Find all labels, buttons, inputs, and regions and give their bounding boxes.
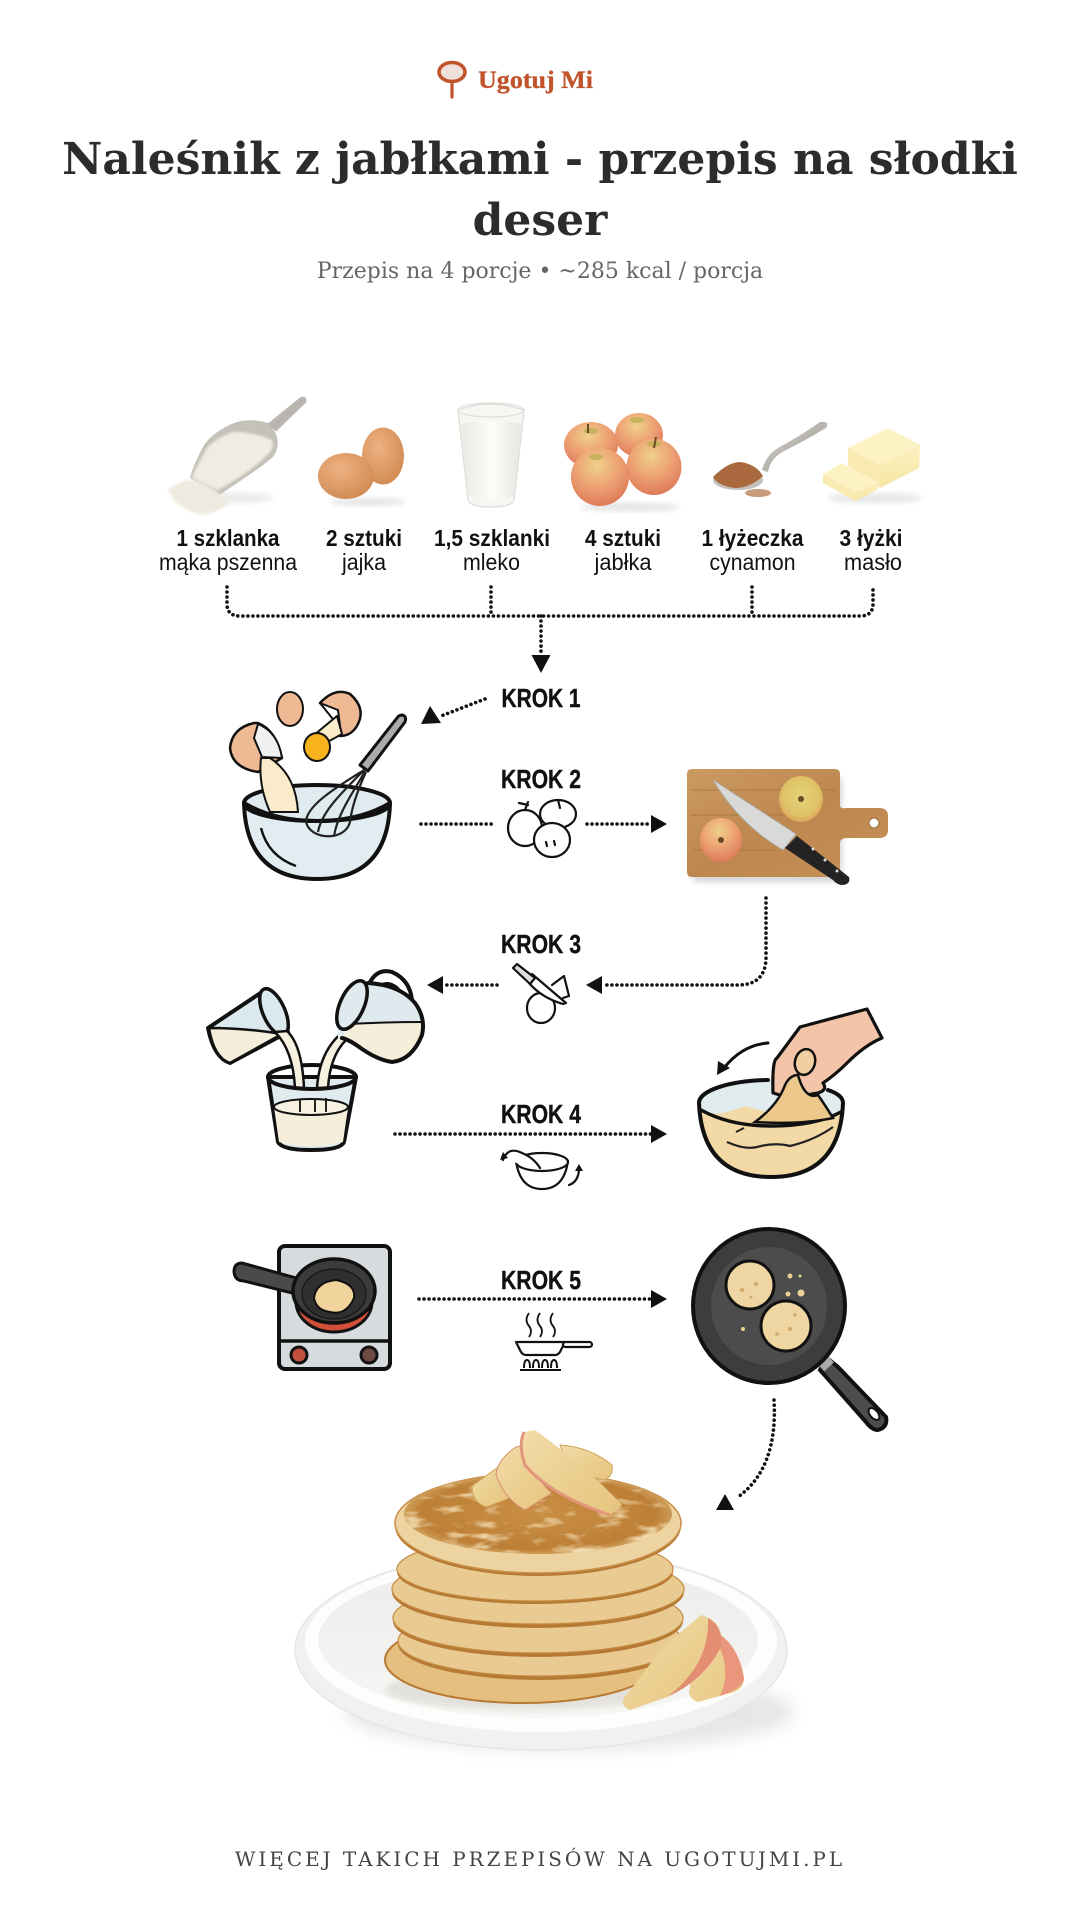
label: eggs: jajka [341,549,386,575]
ingredient: cinnamon spoon [713,422,827,497]
illustration: mixing batter with hand [699,1009,882,1177]
ingredient: apples [564,413,682,511]
illustration: frying pan with pancakes [693,1229,886,1430]
arrow: to step 1 [421,699,485,724]
apple slices on plate [623,1615,744,1710]
label: cinnamon: 1 łyżeczka [702,525,804,551]
label: cinnamon [702,525,804,575]
pancake layers [385,1470,684,1703]
label: milk [434,525,550,575]
icon: apples outline [508,800,576,857]
title: Naleśnik z jabłkami - przepis na słodki [62,134,1018,185]
arrow: board to step 3 [586,898,766,994]
label: flour: 1 szklanka [176,525,280,551]
footer: WIĘCEJ TAKICH PRZEPISÓW NA UGOTUJMI.PL [235,1847,845,1871]
label: flour: mąka pszenna [159,549,297,575]
illustration: pancake stack on plate [295,1430,795,1750]
label: butter: masło [844,549,902,575]
title [62,134,1018,246]
icon: pan on burner [516,1313,592,1370]
arrow: step 2 right [587,815,667,833]
label: eggs: 2 sztuki [326,525,402,551]
label: milk: mleko [463,549,520,575]
illustration: cutting board with apples and knife [687,769,888,885]
ingredient: flour scoop [168,397,306,514]
step label: KROK 2: KROK 2 [501,764,581,794]
illustration: pouring milk into glass [208,971,424,1150]
ingredients row [168,397,923,514]
arrow: step 4 [395,1125,667,1143]
label: apples: 4 sztuki [585,525,661,551]
label: apples: jabłka [594,549,652,575]
label: milk: 1,5 szklanki [434,525,550,551]
icon: mixing bowl with arrows [500,1151,583,1189]
arrow: step 2 left dots [421,822,495,826]
label: apples [585,525,661,575]
apple slices on top [472,1430,622,1515]
logo [439,62,593,97]
arrow: step 5 [419,1290,667,1308]
illustration: pan on stove [234,1246,390,1369]
ingredient: milk glass [458,403,524,507]
step label: KROK 5: KROK 5 [501,1265,581,1295]
label: flour [159,525,297,575]
arrow: pan to plate [716,1400,774,1510]
ingredient labels [159,525,902,575]
title: deser [473,195,607,246]
ingredient: butter [823,428,923,503]
icon: logo spoon [439,62,465,97]
step label: KROK 4: KROK 4 [501,1099,581,1129]
icon: knife cutting apple [513,964,569,1023]
ingredient: eggs [318,428,406,506]
label: butter [840,525,902,575]
step label: KROK 3: KROK 3 [501,929,581,959]
logo wordmark: Ugotuj Mi [478,67,593,94]
illustration: eggs and whisk in bowl [230,692,406,879]
arrow: step 3 left [427,976,497,994]
label: eggs [326,525,402,575]
subtitle: Przepis na 4 porcje • ~285 kcal / porcja [317,259,763,284]
label: cinnamon: cynamon [710,549,796,575]
label: butter: 3 łyżki [840,525,902,551]
step label: KROK 1: KROK 1 [502,683,580,713]
arrow: ingredients bracket [227,587,873,673]
